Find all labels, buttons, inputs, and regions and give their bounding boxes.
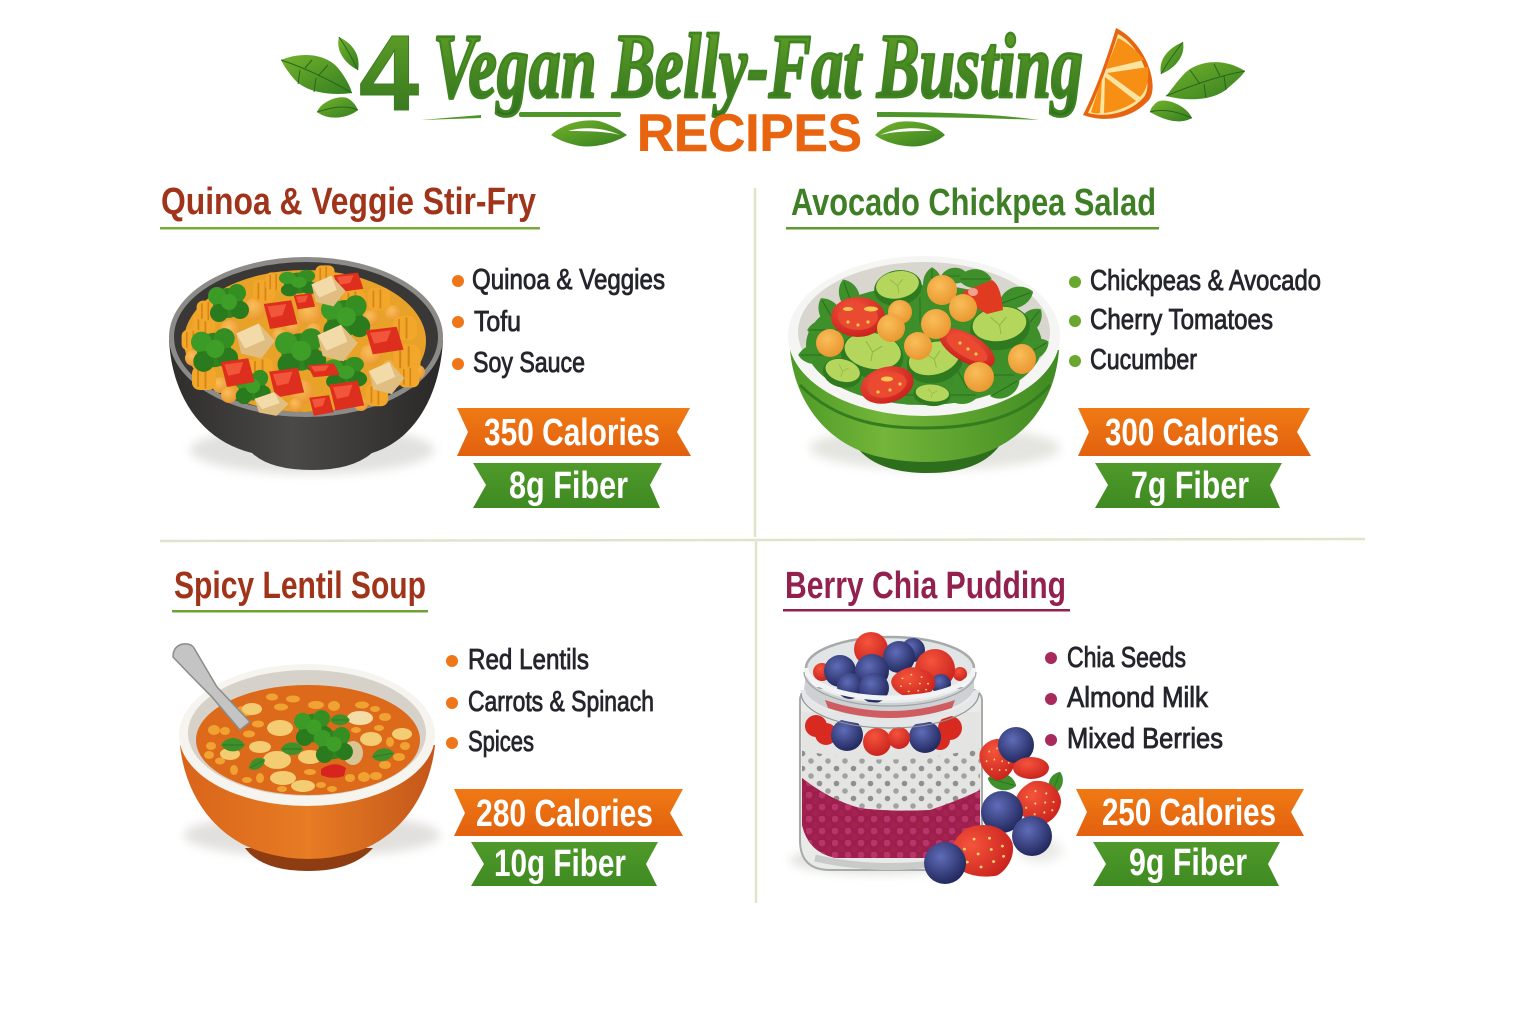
recipe heading: Spicy Lentil Soup [174,565,426,607]
ingredient list [446,644,654,758]
panel: Spicy Lentil Soup [172,565,683,886]
ingredient list: Chia Seeds [1067,642,1186,674]
calories ribbon: 280 Calories [476,793,653,835]
illustration: stir-fry bowl [169,257,443,474]
heading numeral: 4 [359,12,419,133]
icon: spoon [173,644,250,730]
ingredient list: Tofu [474,306,521,338]
ingredient list: Chickpeas & Avocado [1090,265,1321,297]
illustration: soup bowl [173,644,440,871]
fiber ribbon: 8g Fiber [509,465,628,507]
fiber ribbon: 10g Fiber [494,843,626,885]
subtitle: RECIPES [637,104,862,163]
ingredient list: Spices [468,726,534,758]
panel: Quinoa & Veggie Stir-Fry [160,181,691,508]
illustration: chia jar with berries [790,632,1066,890]
calories ribbon: 350 Calories [484,412,660,454]
recipe heading: Quinoa & Veggie Stir-Fry [161,181,536,223]
illustration: salad bowl [788,256,1060,473]
title block [281,12,1245,163]
leaf cluster left [281,37,359,118]
ingredient list: Quinoa & Veggies [472,264,665,296]
decorative leaves under title [551,120,945,146]
underline flourishes [421,112,1039,120]
leaf cluster right [1150,42,1245,121]
panel: Berry Chia Pudding [783,565,1304,890]
recipe heading: Avocado Chickpea Salad [791,182,1156,224]
calories ribbon: 300 Calories [1105,412,1279,454]
fiber ribbon: 9g Fiber [1129,842,1247,884]
ingredient list [452,264,665,379]
ingredient list: Carrots & Spinach [468,686,654,718]
ingredient list: Almond Milk [1067,682,1208,714]
ingredient list: Mixed Berries [1067,723,1223,755]
orange slice icon [1083,28,1153,119]
ingredient list: Soy Sauce [473,347,585,379]
ingredient list [1045,642,1223,755]
ingredient list: Cherry Tomatoes [1090,304,1273,336]
recipe heading: Berry Chia Pudding [785,565,1066,607]
fiber ribbon: 7g Fiber [1131,465,1249,507]
ingredient list [1069,265,1321,376]
panel: Avocado Chickpea Salad [786,182,1321,508]
ingredient list: Cucumber [1090,344,1197,376]
calories ribbon: 250 Calories [1102,792,1276,834]
heading script: Vegan Belly-Fat Busting [433,15,1083,117]
ingredient list: Red Lentils [468,644,589,676]
